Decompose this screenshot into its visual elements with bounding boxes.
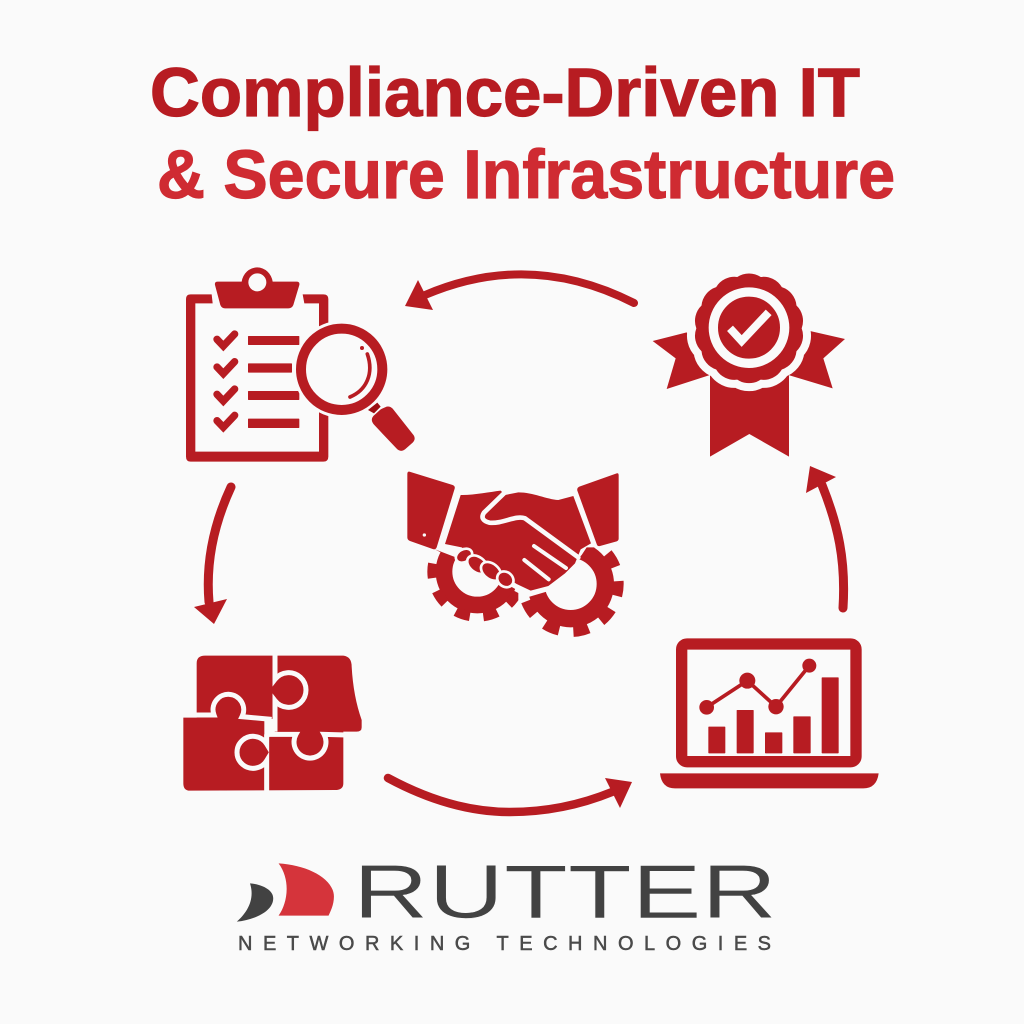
magnifier	[293, 321, 415, 451]
logo: Rutter Networking Technologies	[237, 850, 777, 955]
puzzle silhouette	[183, 656, 362, 791]
icon: laptop with analytics chart	[660, 644, 879, 788]
gear cutaway	[430, 467, 623, 600]
puzzle centre gap	[264, 718, 276, 745]
white ring	[713, 292, 785, 363]
icon: puzzle pieces	[180, 653, 365, 793]
logo mark	[237, 863, 334, 922]
title	[150, 54, 895, 213]
laptop base	[660, 773, 879, 788]
tagline: NETWORKING TECHNOLOGIES	[238, 933, 771, 955]
line chart	[699, 659, 816, 715]
wordmark: RUTTER	[353, 850, 777, 935]
icon: handshake with gears	[407, 467, 623, 631]
bar chart	[708, 677, 839, 753]
bottom-right corner trim	[345, 733, 365, 793]
laptop screen	[682, 644, 856, 762]
left gear	[432, 527, 522, 617]
title: & Secure Infrastructure	[157, 136, 895, 213]
ribbon tails	[653, 332, 710, 389]
clasped hands	[445, 491, 591, 591]
icon: clipboard checklist with magnifier	[186, 267, 415, 462]
checklist rows	[217, 334, 299, 428]
check mark	[730, 312, 769, 341]
icon: certification ribbon badge	[653, 273, 845, 457]
scalloped seal	[695, 273, 803, 383]
right gear	[523, 537, 618, 631]
puzzle seams	[180, 653, 347, 793]
thumb and finger outlines	[443, 493, 578, 590]
title: Compliance-Driven IT	[150, 54, 860, 131]
arrow: bottom, puzzle to laptop	[388, 778, 632, 812]
arrow: top, badge to checklist	[405, 274, 634, 310]
left fist fingers	[455, 548, 515, 589]
arrow: left, checklist to puzzle	[194, 487, 231, 624]
arrow: right, laptop to badge	[806, 466, 844, 608]
left cuff	[407, 472, 455, 549]
right cuff	[577, 473, 619, 546]
clipboard clip	[215, 267, 299, 308]
clipboard frame	[186, 294, 328, 462]
